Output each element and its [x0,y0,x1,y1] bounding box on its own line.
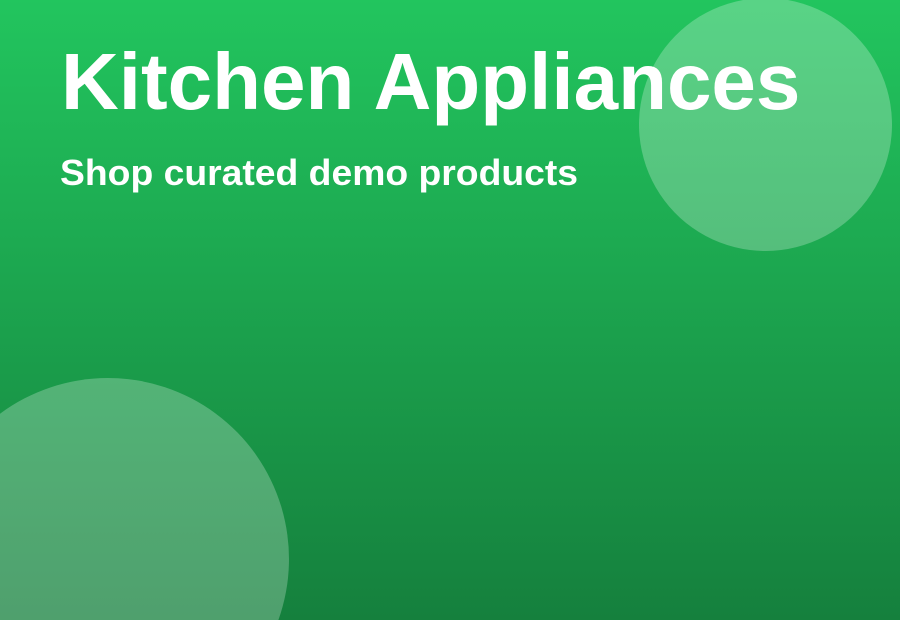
subtitle: Shop curated demo products [60,152,578,193]
decorative circle: top right [639,0,892,251]
decorative circle: bottom left [0,378,289,620]
title: Kitchen Appliances [61,37,800,126]
